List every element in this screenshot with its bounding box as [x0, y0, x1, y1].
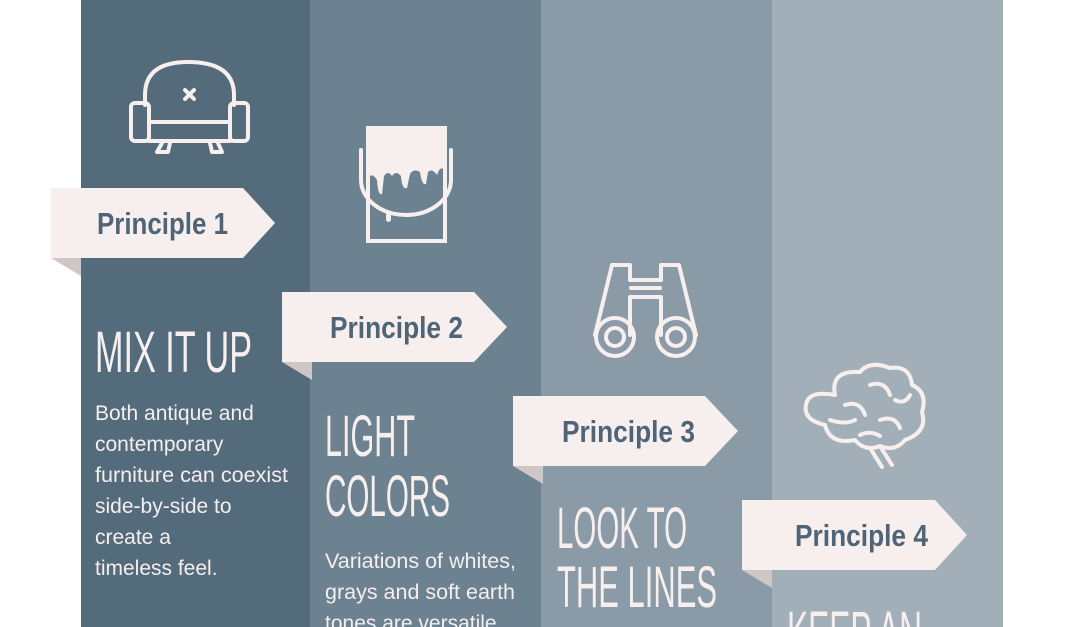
text: col2 body: Variations of whites,	[325, 550, 516, 573]
icon: brain	[806, 365, 924, 467]
text: col1 body	[95, 402, 288, 580]
icon: binoculars	[595, 265, 696, 356]
panel: column 2	[310, 0, 541, 627]
text: col1 body: furniture can coexist	[95, 464, 288, 487]
panel: column 3: THE LINES	[557, 555, 717, 620]
ribbon: principle 3: Principle 3	[562, 414, 695, 449]
title: look to the lines: LOOK TO	[557, 496, 687, 561]
ribbon: principle 2: Principle 2	[330, 310, 463, 345]
panel: column 2: COLORS	[325, 464, 450, 529]
panel: column 4	[772, 0, 1003, 627]
text: col2 body	[325, 550, 516, 627]
text: col1 body: timeless feel.	[95, 557, 218, 580]
ribbon: principle 2	[282, 292, 507, 380]
ribbon: principle 1: Principle 1	[97, 206, 228, 241]
ribbon: principle 4	[742, 500, 967, 588]
panel: column 1	[81, 0, 310, 627]
ribbon: principle 1	[51, 188, 275, 276]
icon: paint can	[361, 128, 451, 241]
title: mix it up: MIX IT UP	[95, 320, 252, 385]
ribbon: principle 4: Principle 4	[795, 518, 929, 553]
ribbon: principle 3	[513, 396, 738, 484]
text: col1 body: contemporary	[95, 433, 224, 456]
title: light colors: LIGHT	[325, 404, 415, 469]
text: col1 body: side-by-side to	[95, 495, 232, 518]
panel: column 3	[541, 0, 772, 627]
icon: armchair	[131, 62, 248, 152]
text: col2 body: grays and soft earth	[325, 581, 515, 604]
text: col1 body: Both antique and	[95, 402, 254, 425]
text: col1 body: create a	[95, 526, 171, 549]
